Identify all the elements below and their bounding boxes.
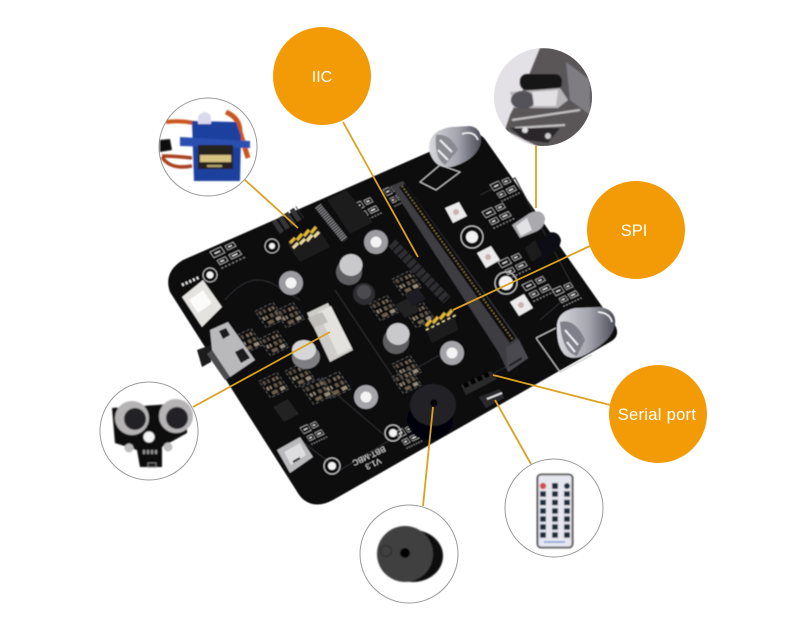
top infrared LED: [420, 126, 481, 190]
main circuit board photo: [168, 126, 617, 504]
integrated circuit: [273, 190, 426, 422]
large white JST connector: [307, 303, 353, 362]
board traces: [225, 178, 575, 470]
label circle: Serial port: Serial port: [618, 406, 696, 424]
photo circle: buzzer: [360, 505, 458, 603]
infrared receiver: [525, 232, 561, 264]
slide power switch: [197, 322, 255, 380]
black pin header top: [276, 212, 300, 228]
board version label: BBT-MBC: [351, 444, 387, 467]
connector line: servo: [245, 180, 298, 228]
connector line: IIC: [343, 122, 418, 257]
buzzer: [407, 384, 456, 440]
connector line: remote: [495, 400, 531, 464]
inductor: [353, 283, 375, 305]
photo circle: ultrasonic module: [100, 382, 198, 480]
photo circle: infrared sensor close-up: [494, 48, 592, 146]
board outline: [168, 133, 617, 504]
board version label: [351, 444, 391, 476]
mounting washers: [279, 230, 464, 409]
label circle: SPI: SPI: [621, 222, 647, 240]
serial port header: [461, 371, 497, 395]
bottom infrared LED: [536, 307, 615, 372]
label circle: SPI: [587, 181, 685, 279]
IR receiver socket: [479, 389, 504, 408]
label circle: IIC: [273, 27, 371, 125]
IIC pin header: [287, 227, 330, 262]
label circle: Serial port: [609, 365, 707, 463]
SPI pin header: [424, 310, 458, 343]
electrolytic capacitors: [292, 254, 410, 369]
small infrared emitter: [512, 211, 545, 238]
micro USB port: [277, 437, 313, 473]
photo circle: remote control: [505, 459, 603, 557]
micro:bit edge connector slot: [391, 181, 528, 372]
connector line: infrared: [535, 145, 537, 208]
connector line: ultrasonic: [193, 332, 330, 407]
connector line: buzzer: [423, 407, 433, 506]
small white JST connector: [182, 277, 222, 327]
connector line: SPI: [453, 246, 590, 310]
photo circle: servo motor: [159, 98, 257, 196]
label circle: IIC: IIC: [312, 69, 332, 86]
board version label: V1.3: [363, 456, 383, 471]
black pin header row: [392, 243, 447, 300]
silkscreen and component clusters: [210, 176, 582, 448]
RGB LEDs: [445, 202, 533, 316]
connector line: serial port: [493, 375, 610, 405]
infographic canvas: [100, 27, 707, 604]
small ringed holes: [203, 226, 517, 474]
